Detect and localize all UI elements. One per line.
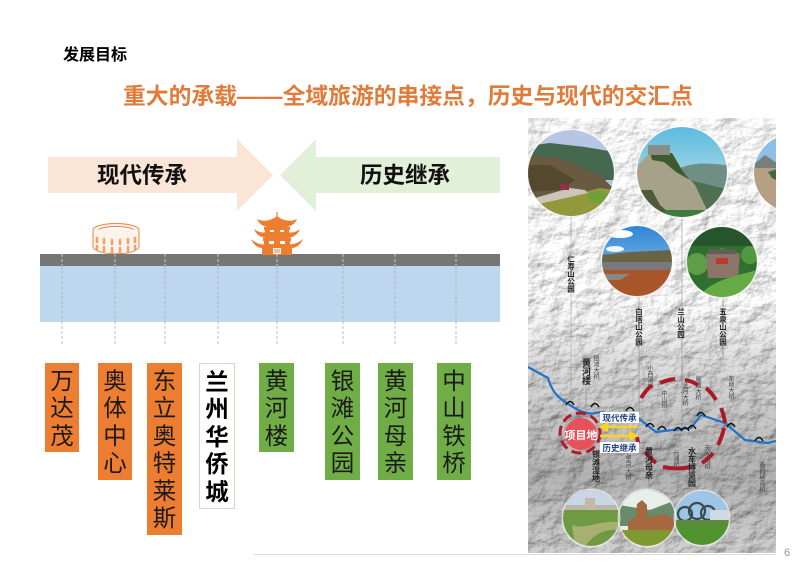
- label: Zhongshan Iron Bridge: 铁: [442, 422, 466, 448]
- label: Dongli Outlets: 特: [153, 450, 176, 476]
- timeline connector ticks: [62, 254, 456, 344]
- park labels: 白塔山公园: [634, 307, 644, 347]
- photo: Yellow River Mother statue: [619, 490, 677, 546]
- photo: Lanshan cliff: [637, 127, 727, 217]
- dashed circle: project site: [560, 413, 600, 453]
- bridge labels: 天水路桥: [703, 445, 710, 470]
- label: Zhongshan Iron Bridge: 桥: [442, 450, 466, 476]
- map labels: lower sites: 水车博览园: [688, 446, 696, 488]
- label: Yellow River Tower: 河: [265, 395, 288, 421]
- project site marker: 项目地: [564, 428, 598, 442]
- label: Yintan Park: 园: [331, 450, 354, 476]
- label: Lanzhou OCT: 兰: [205, 368, 229, 394]
- label: Yellow River Tower on map: 黄河楼: [581, 357, 591, 386]
- label: Yellow River Tower: 楼: [265, 422, 288, 448]
- photo: water wheel park: [675, 491, 730, 546]
- label: Wanda Mall: 茂: [50, 422, 74, 448]
- label: Zhongshan Iron Bridge: 中: [442, 368, 466, 394]
- map labels: lower sites: 银滩湿地: [592, 449, 600, 482]
- page number: 6: [784, 547, 790, 559]
- label: Lanzhou OCT: 州: [205, 396, 229, 422]
- bridge labels: [592, 354, 765, 493]
- park labels: 仁寿山公园: [566, 254, 576, 294]
- arrow: historical inheritance: [280, 139, 500, 211]
- road band: [40, 254, 500, 266]
- label: Yellow River Mother: 河: [384, 395, 407, 421]
- timeline bar: [40, 254, 500, 322]
- label: Olympic Center: 体: [103, 395, 127, 421]
- photo: Wuquan mountain temple: [686, 226, 759, 298]
- label: Dongli Outlets: 立: [153, 395, 176, 421]
- panel: map: [528, 118, 776, 553]
- photo rings: [527, 126, 800, 547]
- label: Olympic Center: [98, 363, 132, 480]
- section heading: 发展目标: [63, 47, 127, 64]
- river band: [40, 266, 500, 322]
- label: Lanzhou OCT: 侨: [205, 451, 229, 477]
- bridge labels: 金河大桥: [681, 381, 688, 407]
- photo: Baita mountain bridge: [602, 226, 672, 296]
- label: Wanda Mall: [45, 363, 79, 452]
- label: Dongli Outlets: 奥: [153, 422, 176, 448]
- label: Zhongshan Iron Bridge: [437, 363, 471, 480]
- map labels: lower sites: [592, 446, 696, 488]
- terrain background: [528, 118, 776, 553]
- label: Olympic Center: 奥: [103, 368, 127, 394]
- label: Dongli Outlets: 莱: [153, 478, 176, 504]
- map callout: history: 历史继承: [602, 443, 637, 453]
- label: Lanzhou OCT: [199, 363, 235, 509]
- bridge labels: 桑园峡高桥: [758, 461, 765, 493]
- bridge labels: 东岗大桥: [727, 374, 734, 400]
- park labels: [566, 254, 728, 347]
- label: Yintan Park: 公: [331, 422, 354, 448]
- label: Zhongshan Iron Bridge: 山: [442, 395, 466, 421]
- label: Wanda Mall: 万: [50, 368, 74, 394]
- footer rule: [254, 554, 776, 555]
- label: Yintan Park: 滩: [331, 395, 354, 421]
- project site marker: [564, 418, 598, 450]
- arrow label: historical inheritance: 历史继承: [360, 163, 450, 188]
- dashed circle: core zone: [637, 379, 725, 468]
- bridge markers: [566, 402, 763, 441]
- park labels: 五泉山公园: [718, 308, 728, 347]
- connector lines: [571, 216, 725, 492]
- label: Dongli Outlets: 斯: [153, 505, 176, 531]
- photo: river bank: [754, 138, 776, 208]
- label: Yellow River Tower: [259, 363, 294, 452]
- bridge labels: 七里河大桥: [624, 449, 631, 481]
- bridge labels: 雁滩大桥: [694, 376, 701, 401]
- label: Olympic Center: 心: [103, 450, 127, 476]
- title: 重大的承载——全域旅游的串接点，历史与现代的交汇点: [123, 83, 693, 109]
- label: Yellow River Tower: 黄: [265, 368, 288, 394]
- bridge labels: 中山桥: [660, 389, 667, 409]
- label: Lanzhou OCT: 城: [205, 478, 229, 504]
- label: Yellow River Mother: 黄: [384, 368, 407, 394]
- label: Dongli Outlets: [147, 363, 182, 535]
- label: Yellow River Mother: [378, 363, 413, 480]
- label: Yintan Park: 银: [331, 368, 354, 394]
- map labels: lower sites: 黄河母亲: [644, 446, 654, 480]
- bridge labels: 银滩大桥: [592, 354, 599, 380]
- arrow label: modern inheritance: 现代传承: [97, 163, 187, 188]
- map callout: modern: 现代传承: [602, 413, 637, 423]
- label: Wanda Mall: 达: [50, 395, 74, 421]
- label: Yintan Park: [325, 363, 360, 480]
- label: Lanzhou OCT: 华: [205, 424, 229, 450]
- icon: Yellow River tower: [251, 212, 303, 255]
- label: Dongli Outlets: 东: [153, 368, 176, 394]
- river: [528, 367, 776, 443]
- arrow: modern inheritance: [48, 139, 273, 211]
- map arrow: rightward: [600, 435, 634, 437]
- park labels: 兰山公园: [676, 307, 686, 339]
- label: Yellow River Mother: 亲: [384, 450, 407, 476]
- map arrow: leftward: [603, 426, 637, 428]
- bridge labels: 元通桥: [672, 450, 679, 469]
- label: Yellow River Mother: 母: [384, 422, 407, 448]
- photo: Renshou mountain: [528, 130, 615, 220]
- bridge labels: 小西湖桥: [646, 364, 653, 390]
- icon: stadium: [92, 223, 140, 254]
- photo: Yintan wetland: [563, 490, 620, 546]
- label: Olympic Center: 中: [103, 422, 127, 448]
